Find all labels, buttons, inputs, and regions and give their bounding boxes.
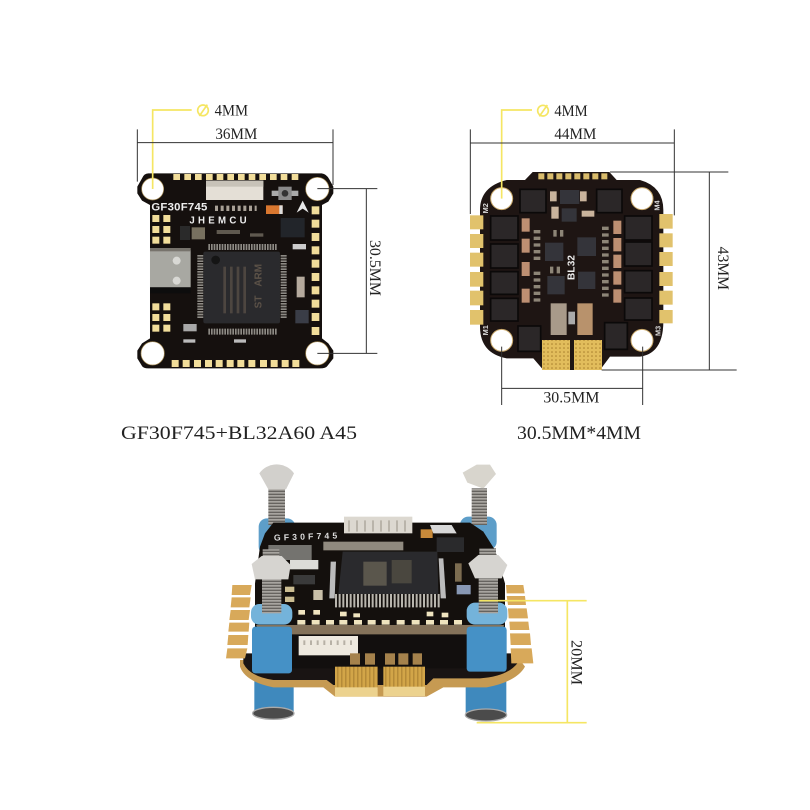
rear screws <box>259 464 496 525</box>
power pads <box>335 667 425 690</box>
label: mounting spacing: 30.5MM <box>543 389 599 406</box>
silkscreen: model: GF30F745 <box>274 530 338 543</box>
panel: assembled stack photo <box>226 464 587 723</box>
hole callout line <box>153 110 192 189</box>
motor solder pads <box>470 214 673 325</box>
solder pads <box>152 174 319 367</box>
white connector <box>299 636 358 655</box>
MCU pins <box>335 581 440 621</box>
IMU and button <box>430 525 464 552</box>
board: flight controller PCB <box>137 173 333 368</box>
chip markings <box>223 264 264 313</box>
rear standoffs <box>259 517 497 555</box>
caption: mounting size: 30.5MM*4MM <box>517 423 641 444</box>
shunt resistors <box>551 303 593 335</box>
diameter symbol <box>198 105 208 116</box>
label: hole diameter: 4MM <box>215 102 248 119</box>
silkscreen: motor labels: M3 <box>654 326 663 336</box>
chip markings: ARM <box>253 264 264 287</box>
small components <box>180 226 309 343</box>
label: board width: 36MM <box>215 126 257 143</box>
label: board height: 43MM <box>714 247 731 290</box>
front standoffs upper <box>252 627 507 673</box>
silkscreen brand label: JHEMCU <box>189 215 247 226</box>
MCU chip <box>203 252 280 323</box>
panel: flight controller top view <box>137 102 383 368</box>
arrow logo <box>297 201 309 213</box>
silkscreen: motor labels: M1 <box>481 325 490 335</box>
label: hole diameter: 4MM <box>554 103 588 120</box>
mounting holes <box>141 177 329 365</box>
FC solder pads <box>297 610 462 625</box>
silkscreen: BL32: BL32 <box>567 255 578 280</box>
label: board width: 44MM <box>554 126 596 143</box>
standoff feet <box>253 707 507 721</box>
front screws <box>252 548 507 613</box>
signal pads <box>538 173 607 179</box>
flight controller board <box>255 523 505 630</box>
passive strips <box>537 227 605 303</box>
IMU chip <box>281 218 305 237</box>
board: ESC PCB <box>480 172 663 370</box>
standoff collars <box>251 603 507 625</box>
regulator passives <box>550 191 594 219</box>
MOSFETs <box>491 189 652 351</box>
capacitor <box>266 205 283 214</box>
front standoff lower stems <box>254 677 506 713</box>
dimension lines <box>470 129 737 405</box>
USB port <box>268 545 318 584</box>
height dimension <box>477 601 587 723</box>
hole callout line <box>502 110 532 199</box>
lower dark area <box>290 633 470 668</box>
small copper pads <box>350 653 422 665</box>
mounting holes <box>491 188 653 351</box>
button <box>272 187 298 200</box>
USB-C port <box>150 248 191 293</box>
ESC board <box>240 660 525 697</box>
dimension lines <box>137 129 377 353</box>
label: stack height: 20MM <box>568 640 585 685</box>
caption: model name: GF30F745+BL32A60 A45 <box>121 423 357 444</box>
silkscreen: motor labels: M4 <box>652 200 661 211</box>
MCU pins <box>200 247 284 332</box>
silkscreen: brand <box>323 542 403 550</box>
silkscreen model label: GF30F745 <box>151 202 207 214</box>
silkscreen: motor labels: M2 <box>481 203 490 213</box>
silkscreen: motor labels <box>481 200 663 336</box>
motor pads right <box>506 585 533 663</box>
chip markings: ST <box>253 296 264 308</box>
panel: ESC top view <box>470 103 737 406</box>
driver chips <box>545 190 596 294</box>
rear connector <box>344 517 412 533</box>
power pads <box>542 340 602 370</box>
diameter symbol <box>538 105 548 116</box>
capacitors <box>522 218 621 303</box>
orange capacitor <box>421 529 433 538</box>
FC side components <box>285 563 471 602</box>
motor pads left <box>226 585 252 658</box>
connector <box>206 181 263 208</box>
label: mounting spacing: 30.5MM <box>366 240 383 296</box>
MCU chip <box>329 552 446 598</box>
